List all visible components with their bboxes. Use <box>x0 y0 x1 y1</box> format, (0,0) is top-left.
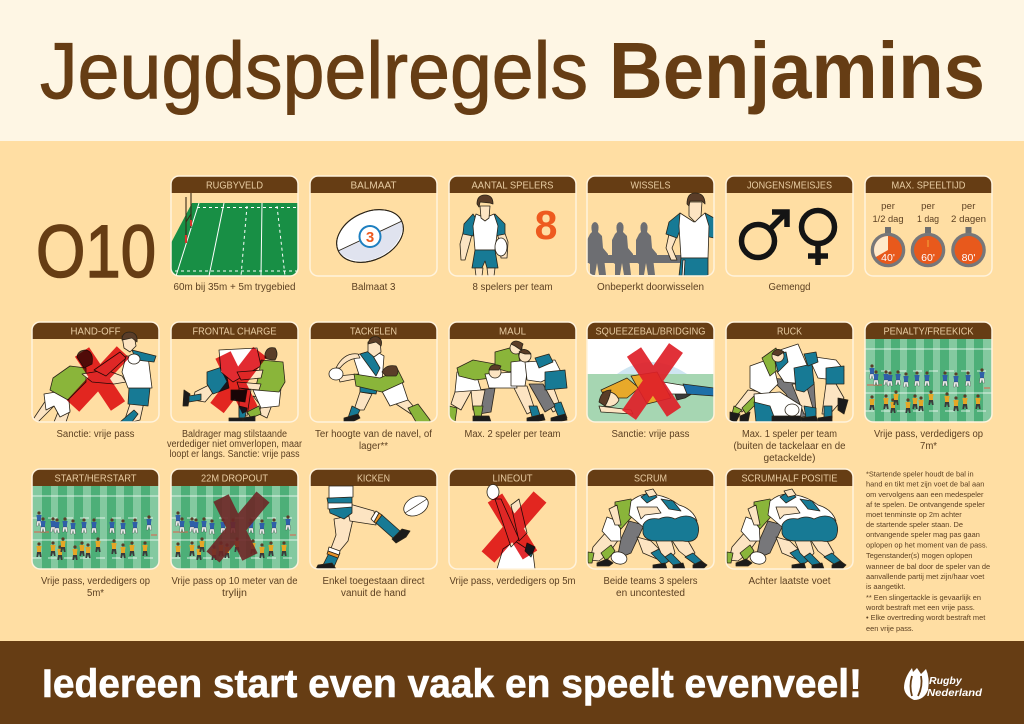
player figure <box>460 195 508 276</box>
heading: AANTAL SPELERS <box>472 180 554 192</box>
footnotes: oplopen op het moment van de pass. <box>866 540 988 550</box>
caption: lager** <box>359 441 388 452</box>
timer labels: 1 dag <box>917 214 939 225</box>
heading: HAND-OFF <box>70 326 120 338</box>
caption: Max. 2 speler per team <box>464 429 560 440</box>
title: Benjamins <box>609 26 985 115</box>
timer 80 minutes: 80' <box>962 252 975 264</box>
caption <box>172 576 298 599</box>
heading: LINEOUT <box>492 472 533 484</box>
footer band <box>0 641 1024 724</box>
icon: ball size 3: 3 <box>366 229 374 246</box>
heading: RUCK <box>777 326 802 338</box>
players <box>329 337 430 422</box>
caption: Vrije pass, verdedigers op <box>874 429 983 440</box>
heading: KICKEN <box>357 472 390 484</box>
pitch illustration <box>171 203 298 276</box>
heading: TACKELEN <box>350 326 397 338</box>
red cross <box>629 348 676 415</box>
caption: Sanctie: vrije pass <box>56 429 134 440</box>
heading: MAX. SPEELTIJD <box>892 180 966 192</box>
footnotes: *Startende speler houdt de bal in <box>866 470 974 478</box>
card: aantal spelers <box>449 176 576 293</box>
title: Jeugdspelregels <box>40 26 588 115</box>
card: tackelen <box>310 322 437 452</box>
card: hand-off <box>32 322 159 440</box>
footnotes: de startende speler staan. De <box>866 520 963 529</box>
footnotes: is aangetikt. <box>866 582 905 591</box>
timer labels: per <box>921 201 935 212</box>
caption: Beide teams 3 spelers <box>604 576 698 587</box>
caption <box>315 429 432 452</box>
card: max. speeltijd <box>865 176 992 276</box>
card: squeezebal/bridging <box>587 322 714 440</box>
caption: Gemengd <box>768 282 810 293</box>
pitch with players <box>865 339 992 422</box>
card: kicken <box>310 469 437 599</box>
caption <box>41 576 150 599</box>
caption: Max. 1 speler per team <box>742 429 837 440</box>
players <box>32 332 156 422</box>
red cross <box>73 352 123 406</box>
goal posts <box>186 193 191 243</box>
header band <box>0 0 1024 141</box>
footnotes: een vrije pass. <box>866 624 914 633</box>
header <box>865 322 992 339</box>
dark cross <box>213 497 263 557</box>
logo: Rugby Nederland <box>904 668 983 700</box>
scrum illustration <box>727 489 846 569</box>
caption: Sanctie: vrije pass <box>612 429 690 440</box>
heading: SCRUMHALF POSITIE <box>742 472 838 484</box>
heading: 22M DROPOUT <box>201 472 269 484</box>
caption: trylijn <box>222 588 247 599</box>
caption: Baldrager mag stilstaande <box>182 429 287 440</box>
header <box>171 176 298 193</box>
caption: Enkel toegestaan direct <box>322 576 425 587</box>
timer 40 minutes: 40' <box>881 252 895 264</box>
header <box>587 176 714 193</box>
caption: Vrije pass op 10 meter van de <box>172 576 298 587</box>
header <box>171 322 298 339</box>
heading: RUGBYVELD <box>206 180 263 192</box>
header <box>726 322 853 339</box>
timer 60 minutes: 60' <box>921 252 935 264</box>
caption <box>734 429 846 464</box>
red cross <box>488 497 540 557</box>
footnotes: Tegenstander(s) mogen oplopen <box>866 551 972 560</box>
caption <box>167 429 303 460</box>
caption: Onbeperkt doorwisselen <box>597 282 704 293</box>
logo: Rugby Nederland: Rugby <box>929 675 963 687</box>
footnotes: ontvangende speler mag pas gaan <box>866 530 980 539</box>
backdrop <box>587 339 714 422</box>
footnotes: • Elke overtreding wordt bestraft met <box>866 613 985 622</box>
caption <box>604 576 698 599</box>
players <box>183 348 285 422</box>
card: ruck <box>726 322 853 464</box>
caption: Ter hoogte van de navel, of <box>315 429 432 440</box>
footnotes: hand en tikt met zijn voet de bal aan <box>866 480 984 488</box>
header <box>726 176 853 193</box>
footnotes <box>865 470 990 633</box>
caption: Vrije pass, verdedigers op 5m <box>450 576 576 587</box>
kicking player <box>316 486 432 569</box>
ball <box>495 238 507 256</box>
footer slogan: Iedereen start even vaak en speelt evenveel! <box>42 662 862 706</box>
header <box>449 176 576 193</box>
footnotes: moet tenminste op 2m achter <box>866 510 962 519</box>
card: jongens/meisjes <box>726 176 853 293</box>
footnotes: om vervolgens aan een medespeler <box>866 490 984 499</box>
caption <box>322 576 425 599</box>
ball <box>487 484 499 500</box>
caption: en uncontested <box>616 588 685 599</box>
card: maul <box>449 322 576 440</box>
caption: 7m* <box>920 441 937 452</box>
timer labels: per <box>881 201 895 212</box>
heading: PENALTY/FREEKICK <box>884 326 974 338</box>
heading: BALMAAT <box>350 180 397 192</box>
header <box>865 176 992 193</box>
caption: vanuit de hand <box>341 588 406 599</box>
card: start/herstart <box>32 469 159 599</box>
age group label: O10 <box>36 210 156 293</box>
substitutes on bench <box>587 222 682 275</box>
caption: 8 spelers per team <box>472 282 552 293</box>
header <box>32 469 159 486</box>
card: wissels <box>587 176 714 293</box>
pitch with players <box>171 486 298 569</box>
caption: getackelde) <box>764 453 816 464</box>
footnotes: wordt bestraft met een vrije pass. <box>865 603 975 612</box>
caption: 5m* <box>87 588 104 599</box>
heading: JONGENS/MEISJES <box>747 180 832 192</box>
standing substitute player <box>666 193 714 276</box>
footnotes: af te spelen. De ontvangende speler <box>866 500 985 509</box>
card: rugbyveld <box>171 176 298 293</box>
timer labels: 2 dagen <box>951 214 986 225</box>
footnotes: aanvallende partij met zijn/haar voet <box>866 572 984 581</box>
icon: male symbol <box>742 212 787 258</box>
heading: SCRUM <box>634 472 667 484</box>
header <box>310 469 437 486</box>
players <box>730 344 848 422</box>
header <box>32 322 159 339</box>
red cross <box>217 352 260 410</box>
timer labels <box>872 201 986 225</box>
header <box>587 322 714 339</box>
header <box>449 469 576 486</box>
caption: Vrije pass, verdedigers op <box>41 576 150 587</box>
card: lineout <box>449 469 576 587</box>
post pads <box>186 220 191 243</box>
timer labels: per <box>962 201 975 212</box>
footnotes: ** Een slingertackle is gevaarlijk en <box>866 593 981 602</box>
caption: 60m bij 35m + 5m trygebied <box>174 282 296 293</box>
header <box>587 469 714 486</box>
players <box>599 372 714 414</box>
caption: Achter laatste voet <box>748 576 831 587</box>
card: balmaat <box>310 176 437 293</box>
card: penalty/freekick <box>865 322 992 452</box>
header <box>310 322 437 339</box>
icon: female symbol <box>802 210 834 265</box>
card: 22m dropout <box>171 469 298 599</box>
footnotes: wanneer de bal door de speler van de <box>865 562 990 571</box>
caption: Balmaat 3 <box>352 282 396 293</box>
number of players: 8 <box>535 202 557 248</box>
header <box>310 176 437 193</box>
heading: WISSELS <box>630 180 670 192</box>
scrum illustration <box>588 489 707 569</box>
throwing player <box>495 499 535 569</box>
caption <box>874 429 983 452</box>
logo: Rugby Nederland: Nederland <box>927 687 983 699</box>
header <box>726 469 853 486</box>
heading: START/HERSTART <box>54 472 137 484</box>
heading: MAUL <box>499 326 526 338</box>
players <box>449 341 567 422</box>
header <box>449 322 576 339</box>
heading: SQUEEZEBAL/BRIDGING <box>596 326 706 338</box>
card: scrum <box>587 469 714 599</box>
header <box>171 469 298 486</box>
card: scrumhalf positie <box>726 469 853 587</box>
heading: FRONTAL CHARGE <box>192 326 276 338</box>
pitch with players <box>32 486 159 569</box>
caption: verdediger niet omverlopen, maar <box>167 439 303 450</box>
timer labels: 1/2 dag <box>872 214 904 225</box>
card: frontal charge <box>167 322 303 460</box>
caption: loopt er langs. Sanctie: vrije pass <box>170 449 300 460</box>
caption: (buiten de tackelaar en de <box>734 441 846 452</box>
